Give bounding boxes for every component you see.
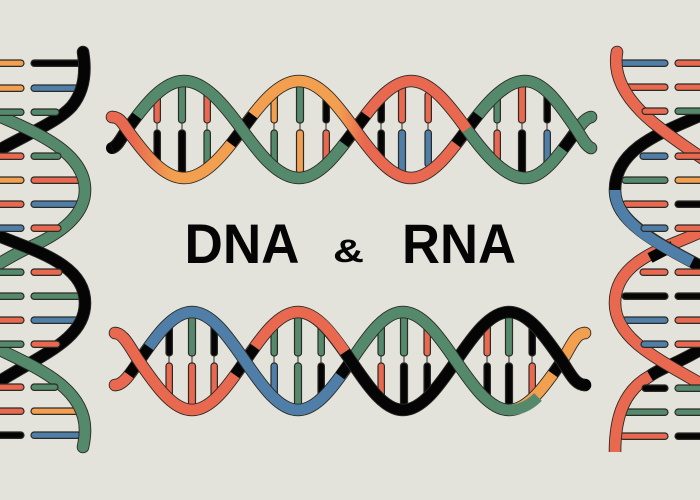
base pairs: bottom helix [166,314,535,408]
strand segments in front: top helix [106,81,597,178]
base pairs: top helix [154,84,550,175]
strand segments behind: bottom helix [109,312,591,410]
title: RNA [402,212,516,275]
title [184,212,516,275]
strands: right helix [615,52,700,452]
base pairs in front of strands: right helix [640,60,700,439]
strands: left helix [0,52,85,447]
base pairs behind strands: right helix [620,60,668,439]
right vertical helix [615,52,700,452]
base pairs behind strands: left helix [31,60,81,438]
bottom horizontal helix [109,312,591,410]
title: & [333,233,364,269]
left vertical helix [0,52,85,447]
base pairs in front of strands: left helix [0,60,62,438]
strand segments behind: top helix [106,81,597,178]
strand segments in front: bottom helix [109,312,591,410]
title: DNA [184,212,300,275]
top horizontal helix [106,81,597,178]
